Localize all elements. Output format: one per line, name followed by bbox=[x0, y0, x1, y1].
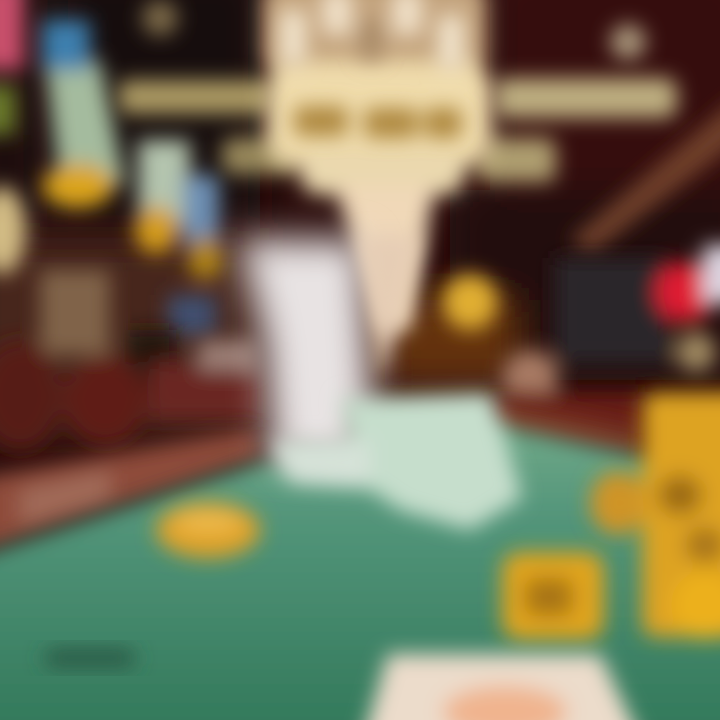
gold coin, centre bbox=[442, 274, 498, 330]
ceiling lights bbox=[142, 0, 646, 60]
white cards, centre bbox=[238, 238, 372, 465]
chandelier detail bbox=[280, 0, 464, 138]
panel: screen and red balloon, right bbox=[500, 245, 720, 440]
gold chip, left of table bbox=[156, 502, 260, 558]
wooden table rail bbox=[0, 400, 640, 552]
playing card, bottom bbox=[360, 654, 645, 720]
gold dice, centre right bbox=[502, 552, 604, 640]
wall shading bbox=[0, 0, 720, 430]
green felt table bbox=[0, 424, 720, 720]
pile of gold dice, right bbox=[590, 392, 720, 639]
wooden beam, right bbox=[570, 95, 720, 255]
chandelier glow bbox=[262, 0, 492, 330]
pale cards on felt bbox=[268, 235, 522, 530]
panel: colourful banners, left bbox=[0, 0, 223, 335]
panel: seats and furniture, left bbox=[0, 270, 260, 450]
heading: blurred title rows bbox=[118, 78, 677, 182]
dark smudge on felt bbox=[45, 648, 135, 668]
